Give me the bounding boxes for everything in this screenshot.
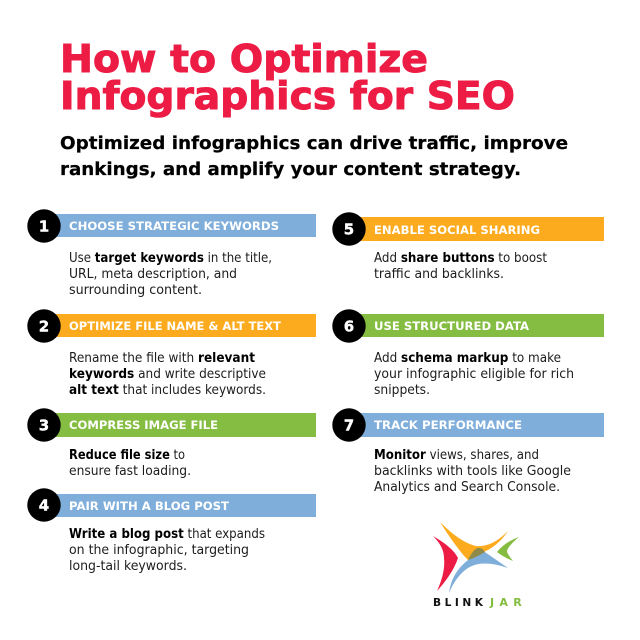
step 6 header bar (349, 314, 604, 337)
step 4 body text: on the infographic, targeting (69, 543, 249, 558)
step 1 heading: CHOOSE STRATEGIC KEYWORDS (69, 219, 279, 233)
step 6 body text: snippets. (374, 383, 430, 398)
step 7 number badge: 7 (344, 416, 354, 434)
step 6 body text (374, 351, 574, 398)
step 2 number badge: 2 (39, 318, 49, 336)
panel: step 1 choose strategic keywords (27, 209, 316, 298)
step 2 number badge (27, 309, 61, 343)
step 6 heading: USE STRUCTURED DATA (374, 319, 529, 333)
logo: BlinkJar (433, 522, 527, 609)
step 4 header bar (44, 494, 316, 517)
step 1 header bar (44, 214, 316, 237)
step 7 header bar (349, 413, 604, 437)
step 7 number badge (332, 408, 366, 442)
step 6 number badge (332, 309, 366, 343)
step 1 body text: Use target keywords in the title, (69, 251, 272, 266)
step 3 body text (69, 448, 191, 479)
logo wordmark: JAR (489, 597, 527, 609)
step 6 number badge: 6 (344, 318, 354, 336)
step 2 body text (69, 351, 266, 398)
panel: step 5 enable social sharing (332, 212, 604, 282)
panel: step 4 pair with a blog post (27, 488, 316, 574)
step 7 body text (374, 448, 571, 495)
step 5 body text: traffic and backlinks. (374, 267, 504, 282)
step 5 heading: ENABLE SOCIAL SHARING (374, 223, 540, 237)
subtitle: Optimized infographics can drive traffic, improve (60, 133, 568, 154)
step 6 body text: your infographic eligible for rich (374, 367, 574, 382)
step 4 body text (69, 527, 265, 574)
step 1 body text (69, 251, 272, 298)
step 1 body text: surrounding content. (69, 283, 202, 298)
title: How to Optimize (60, 37, 428, 82)
step 3 heading: COMPRESS IMAGE FILE (69, 418, 218, 432)
step 1 number badge: 1 (39, 218, 49, 236)
step 7 body text: Analytics and Search Console. (374, 480, 560, 495)
step 2 body text: Rename the file with relevant (69, 351, 255, 366)
step 3 body text: Reduce file size to (69, 448, 185, 463)
logo wordmark (433, 597, 527, 609)
title (60, 37, 515, 119)
step 3 number badge: 3 (39, 416, 49, 434)
step 3 number badge (27, 408, 61, 442)
step 4 body text: Write a blog post that expands (69, 527, 265, 542)
panel: step 3 compress image file (27, 408, 316, 479)
icon: logo star mark (433, 522, 519, 593)
title: Infographics for SEO (60, 74, 515, 119)
step 3 body text: ensure fast loading. (69, 464, 191, 479)
panel: step 7 track performance (332, 408, 604, 495)
subtitle (60, 133, 568, 180)
step 2 body text: keywords and write descriptive (69, 367, 266, 382)
step 3 header bar (44, 413, 316, 437)
step 4 body text: long-tail keywords. (69, 559, 187, 574)
step 1 number badge (27, 209, 61, 243)
step 5 header bar (349, 217, 604, 241)
step 5 body text (374, 251, 547, 282)
step 1 body text: URL, meta description, and (69, 267, 237, 282)
step 6 body text: Add schema markup to make (374, 351, 561, 366)
step 4 heading: PAIR WITH A BLOG POST (69, 499, 229, 513)
step 5 number badge: 5 (344, 220, 354, 238)
step 5 body text: Add share buttons to boost (374, 251, 547, 266)
step 2 header bar (44, 314, 316, 337)
step 4 number badge: 4 (39, 496, 49, 514)
logo wordmark: BLINK (433, 597, 486, 609)
step 7 body text: Monitor views, shares, and (374, 448, 539, 463)
step 7 heading: TRACK PERFORMANCE (374, 418, 522, 432)
step 4 number badge (27, 488, 61, 522)
step 2 heading: OPTIMIZE FILE NAME & ALT TEXT (69, 319, 281, 333)
step 5 number badge (332, 212, 366, 246)
panel: step 2 optimize file name and alt text (27, 309, 316, 398)
subtitle: rankings, and amplify your content strategy. (60, 159, 521, 180)
panel: step 6 use structured data (332, 309, 604, 398)
step 7 body text: backlinks with tools like Google (374, 464, 571, 479)
step 2 body text: alt text that includes keywords. (69, 383, 266, 398)
